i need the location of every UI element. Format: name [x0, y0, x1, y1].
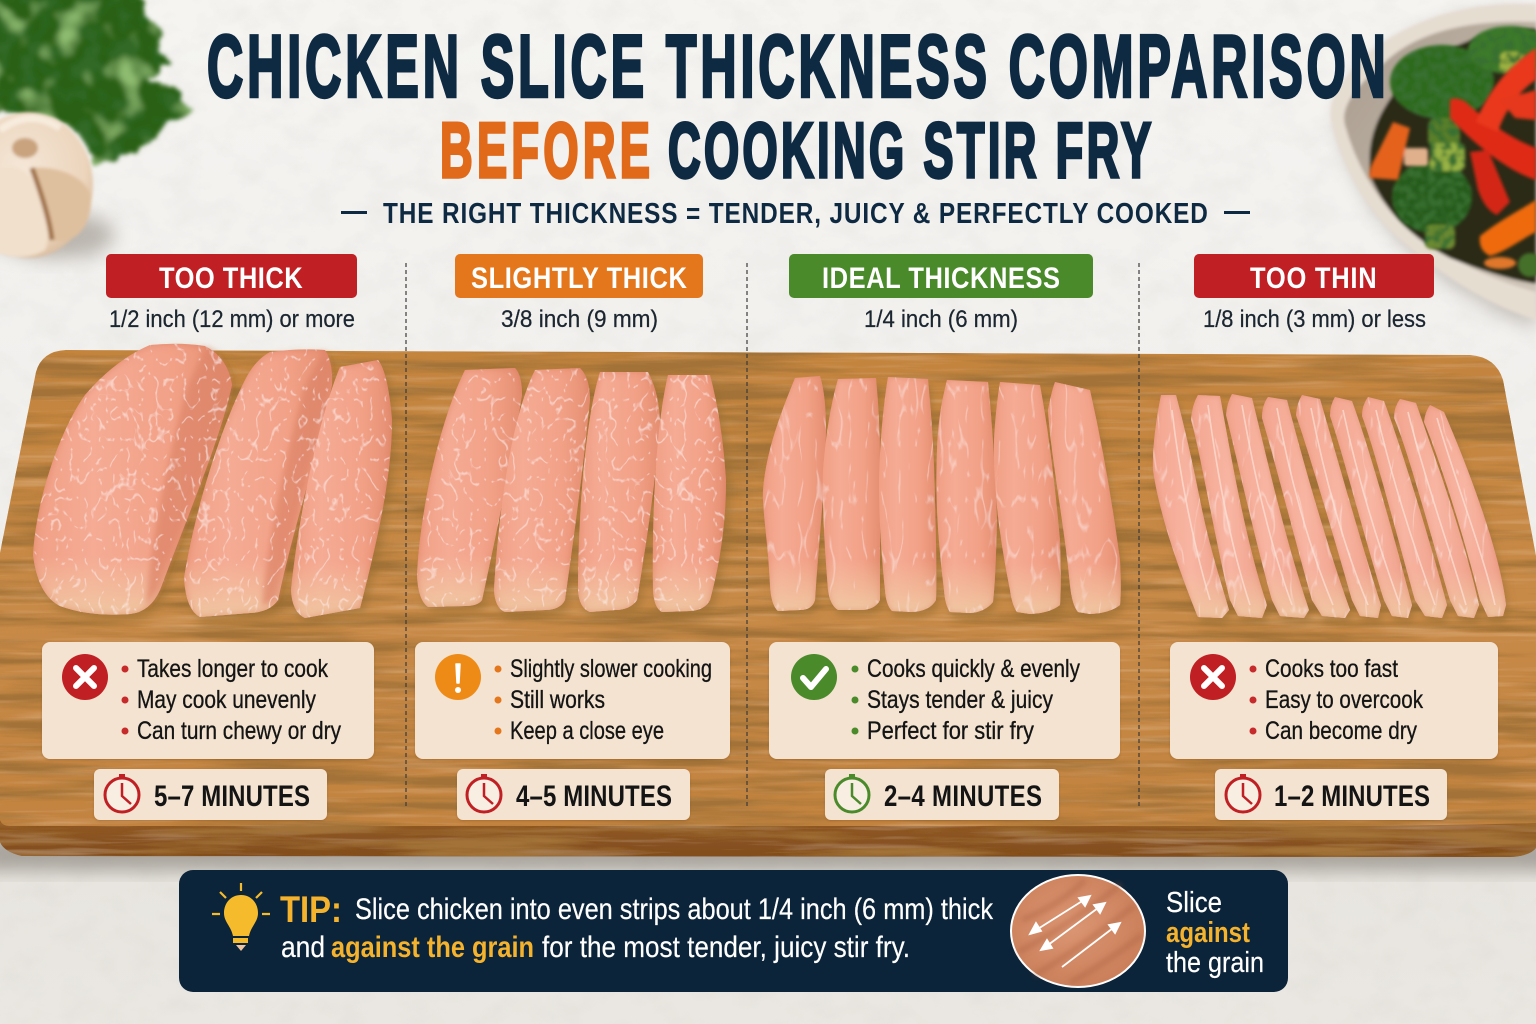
notes: too thin: Can become dry [1265, 717, 1417, 745]
time: 4-5 minutes [457, 769, 690, 820]
icon: check [791, 654, 837, 700]
notes: too thick: Takes longer to cook [137, 655, 328, 683]
grain illustration [1011, 875, 1145, 987]
measurement: 3/8 inch: 3/8 inch (9 mm) [501, 306, 658, 333]
tip text: Slice chicken into even strips about 1/4 inch (6 mm) thick [355, 893, 994, 926]
tip text: for the most tender, juicy stir fry. [542, 931, 910, 964]
column 4: too thin [1153, 254, 1506, 820]
chicken slices: too thick [33, 344, 392, 618]
notes: slightly thick: Slightly slower cooking [510, 655, 712, 683]
time: 2-4 minutes: 2–4 MINUTES [884, 778, 1042, 813]
icon: cross [1190, 654, 1236, 700]
title [207, 18, 1386, 194]
tip text: against the grain [331, 931, 534, 964]
garnish: stir fry bowl [1330, 4, 1536, 328]
caption: slice against the grain: against [1166, 917, 1250, 949]
measurement: 1/8 inch: 1/8 inch (3 mm) or less [1203, 306, 1426, 333]
label: too thick: TOO THICK [159, 261, 303, 294]
caption: slice against the grain [1166, 887, 1264, 979]
notes: too thick: May cook unevenly [137, 686, 316, 714]
tip text: and [281, 931, 325, 964]
notes: slightly thick: Keep a close eye [510, 717, 664, 745]
tip text [280, 889, 994, 964]
chicken slices: ideal thickness [763, 376, 1121, 614]
notes: ideal thickness: Stays tender & juicy [867, 686, 1053, 714]
time: 1-2 minutes: 1–2 MINUTES [1274, 778, 1430, 813]
notes: ideal thickness [769, 642, 1120, 759]
subtitle: THE RIGHT THICKNESS = TENDER, JUICY & PERFECTLY COOKED [383, 197, 1208, 229]
measurement: 1/4 inch: 1/4 inch (6 mm) [864, 306, 1018, 333]
notes: too thin: Easy to overcook [1265, 686, 1423, 714]
label: too thin: TOO THIN [1250, 261, 1377, 294]
title: CHICKEN SLICE THICKNESS COMPARISON [207, 18, 1386, 116]
caption: slice against the grain: the grain [1166, 947, 1264, 979]
label: slightly thick: SLIGHTLY THICK [471, 261, 687, 294]
label: slightly thick [455, 254, 703, 298]
caption: slice against the grain: Slice [1166, 887, 1222, 919]
garnish: garlic [0, 112, 115, 259]
notes: too thin: Cooks too fast [1265, 655, 1398, 683]
time: 5-7 minutes: 5–7 MINUTES [154, 778, 310, 813]
tip banner [179, 870, 1288, 992]
notes: too thick: Can turn chewy or dry [137, 717, 341, 745]
label: ideal thickness: IDEAL THICKNESS [822, 261, 1060, 294]
time: 1-2 minutes [1215, 769, 1447, 820]
chicken slices: slightly thick [417, 368, 726, 612]
tip text: TIP: [280, 889, 342, 930]
cutting board [0, 350, 1536, 871]
icon: exclamation [435, 654, 481, 700]
dashed dividers [406, 263, 1139, 808]
notes: ideal thickness: Cooks quickly & evenly [867, 655, 1080, 683]
time: 5-7 minutes [94, 769, 327, 820]
measurement: 1/2 inch: 1/2 inch (12 mm) or more [109, 306, 355, 333]
column 2: slightly thick [415, 254, 730, 820]
title: BEFORE [440, 106, 650, 194]
icon: light bulb [212, 883, 270, 951]
notes: too thin [1170, 642, 1498, 759]
time: 2-4 minutes [825, 769, 1059, 820]
title: COOKING STIR FRY [668, 106, 1151, 194]
notes: slightly thick: Still works [510, 686, 605, 714]
column 1: too thick [33, 254, 392, 820]
label: too thin [1194, 254, 1434, 298]
notes: slightly thick [415, 642, 730, 759]
notes: too thick [42, 642, 374, 759]
column 3: ideal thickness [763, 254, 1121, 820]
garnish: parsley [0, 0, 195, 170]
label: ideal thickness [789, 254, 1093, 298]
time: 4-5 minutes: 4–5 MINUTES [516, 778, 672, 813]
icon: cross [62, 654, 108, 700]
chicken slices: too thin [1153, 394, 1506, 618]
label: too thick [106, 254, 357, 298]
notes: ideal thickness: Perfect for stir fry [867, 717, 1034, 745]
